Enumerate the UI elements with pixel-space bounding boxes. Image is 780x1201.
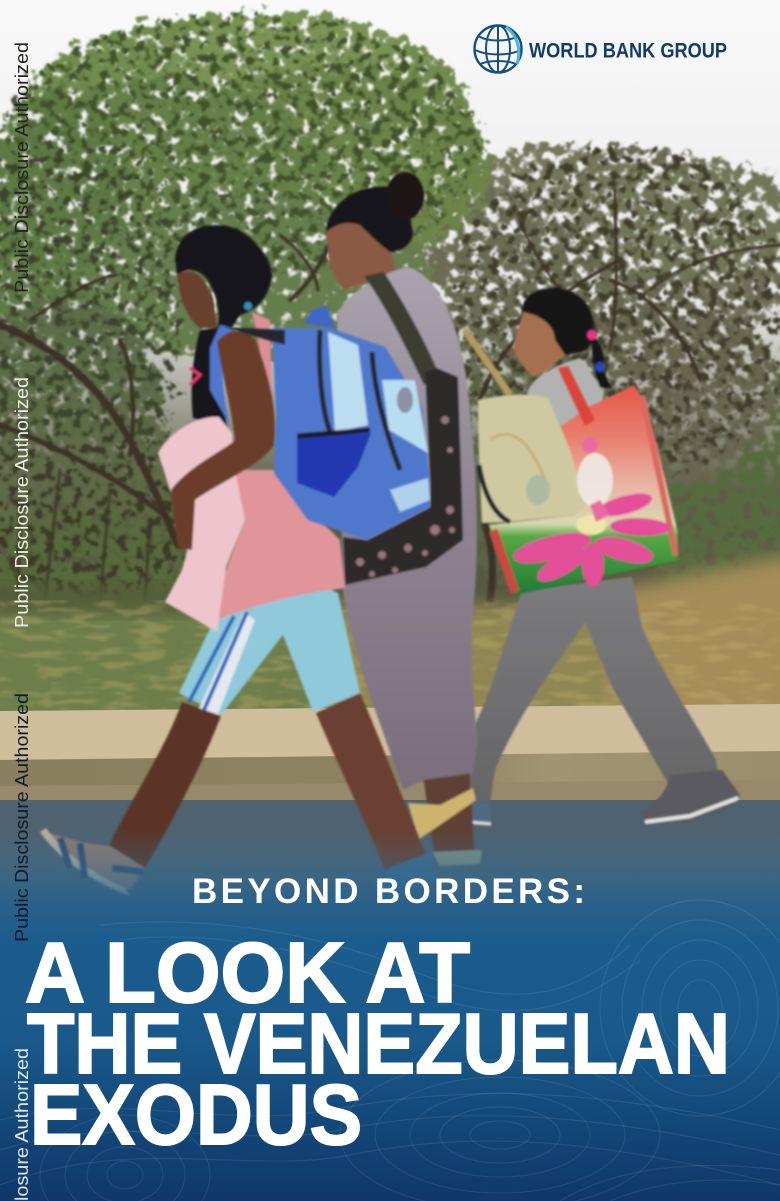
main title: A LOOK AT [25,926,470,1021]
person: woman in the rear with patterned bags [468,288,740,826]
main title: EXODUS [30,1068,362,1163]
side watermark 4: losure Authorized [12,1048,32,1201]
person: girl with blue backpack [40,225,437,900]
backpack [225,305,430,540]
logo: World Bank Group: WORLD BANK GROUP [529,40,727,62]
contour line pattern [0,900,780,1201]
sky background [0,0,780,720]
main title [25,926,730,1163]
trees and vegetation [0,13,780,620]
side watermark 1: Public Disclosure Authorized [12,42,32,293]
side watermark 2: Public Disclosure Authorized [12,377,32,628]
globe icon [474,26,522,72]
tote bags: cream bag and pink-green floral bag [478,366,678,595]
main title: THE VENEZUELAN [27,997,730,1092]
person: tall woman in grey robe [326,172,510,866]
logo: World Bank Group [474,26,727,72]
ground: grass and dry brush [0,550,780,730]
kicker: beyond borders: BEYOND BORDERS: [192,872,585,911]
side watermark 3: Public Disclosure Authorized [12,693,32,942]
bottom blue gradient overlay [0,830,780,1201]
pavement, curb and road [0,704,780,1201]
